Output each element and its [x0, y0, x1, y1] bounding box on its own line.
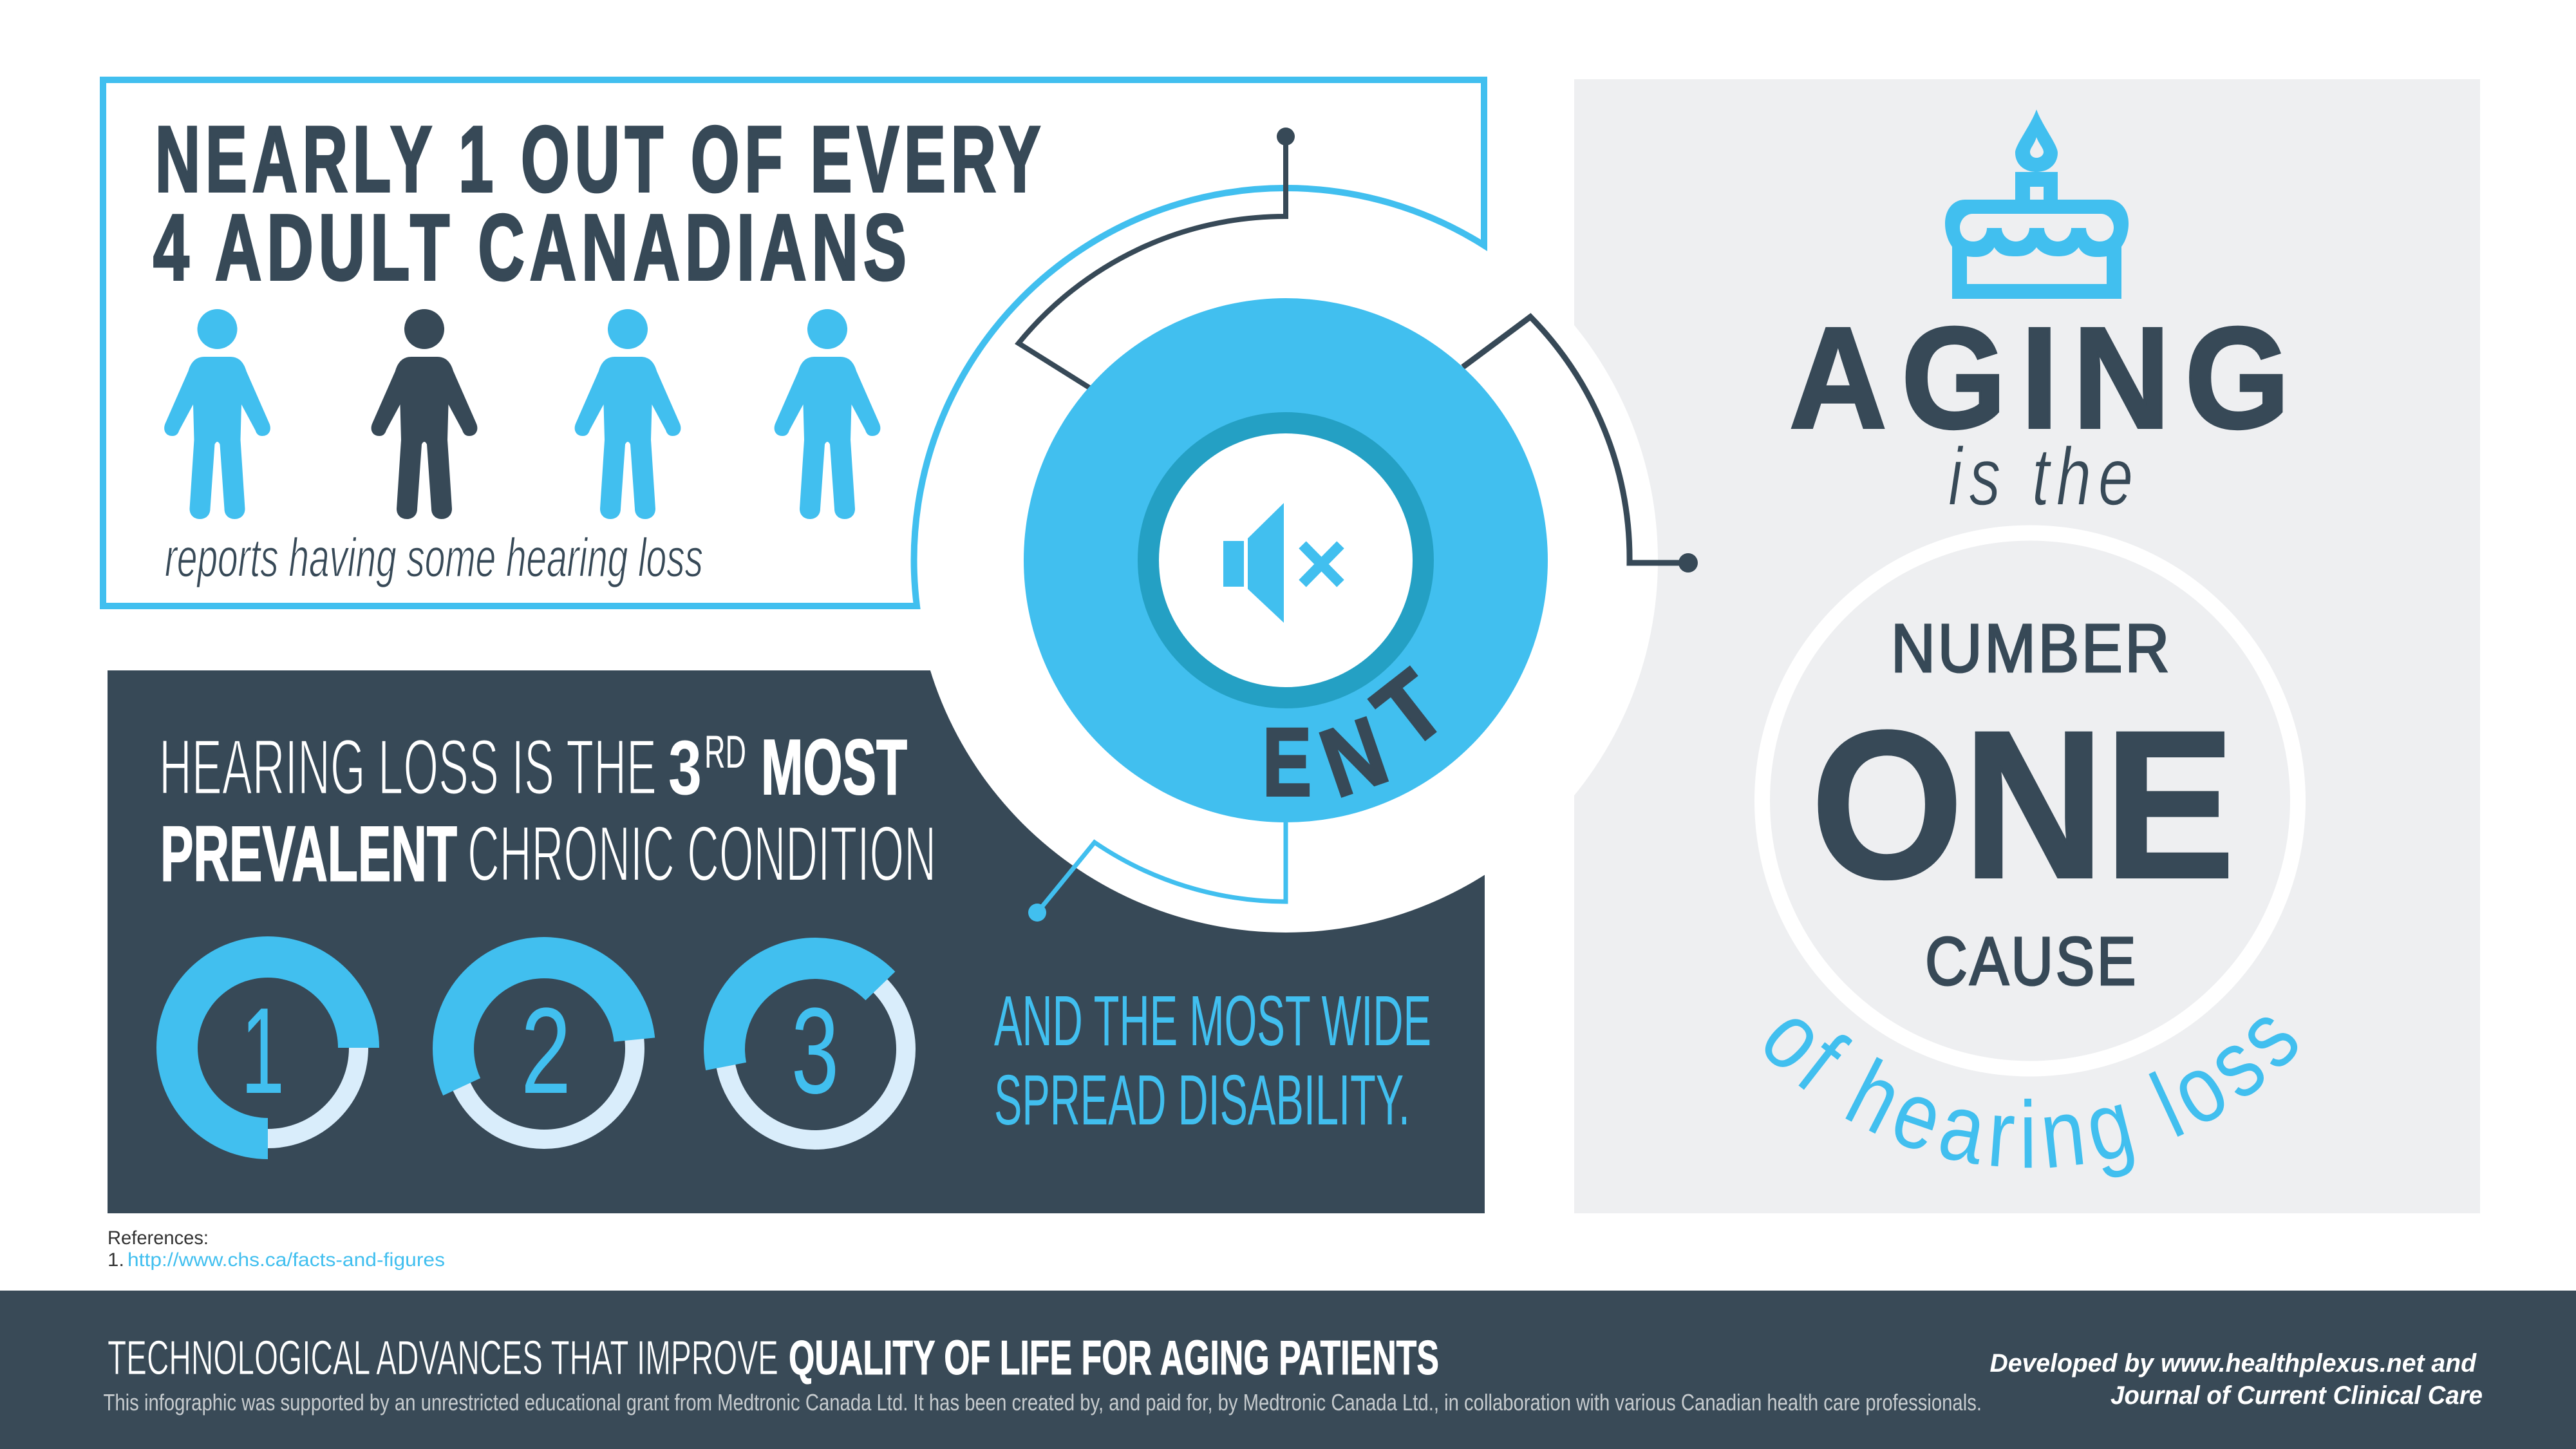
developer credit: Journal of Current Clinical Care	[2111, 1381, 2483, 1410]
heading: hearing loss is the 3rd most prevalent chronic condition: MOST	[761, 723, 907, 811]
heading: aging: AGING	[1789, 298, 2304, 459]
label: ENT	[1263, 650, 1464, 817]
chart: ring 2	[433, 937, 655, 1139]
panel: aging background	[1574, 79, 2480, 1213]
heading: hearing loss is the 3rd most prevalent chronic condition: PREVALENT	[160, 810, 457, 898]
icon: birthday cake	[1945, 109, 2129, 299]
connector: right dark arc	[1463, 317, 1698, 573]
chart: ring 1: 1	[241, 983, 285, 1119]
title: nearly 1 out of every 4 adult Canadians	[153, 107, 1046, 299]
icon: person 2 highlighted	[371, 309, 477, 519]
panel: one in four outline	[103, 80, 1484, 606]
panel: chronic condition background	[108, 670, 1485, 1213]
sponsorship disclaimer: This infographic was supported by an unrestricted educational grant from Medtronic Canada Ltd. It has been created by, and paid for, by Medtronic Canada Ltd., in collaboration with various Canadian health care professionals.	[103, 1389, 1982, 1416]
references: References:	[108, 1227, 209, 1249]
footer headline bold: QUALITY OF LIFE FOR AGING PATIENTS	[789, 1331, 1439, 1385]
label: ENT: N	[1308, 696, 1400, 817]
footer bar	[0, 1291, 2576, 1449]
title: nearly 1 out of every 4 adult Canadians: NEARLY 1 OUT OF EVERY	[155, 107, 1046, 211]
developer credit: Developed by www.healthplexus.net and	[1989, 1349, 2477, 1378]
inner ring	[1149, 422, 1423, 698]
heading: hearing loss is the 3rd most prevalent chronic condition	[159, 723, 936, 898]
icon: four people	[164, 309, 880, 519]
caption: reports having some hearing loss: reports having some hearing loss	[165, 527, 703, 588]
label: ENT: E	[1263, 708, 1312, 816]
text: and the most wide spread disability: AND THE MOST WIDE	[994, 981, 1431, 1061]
chart: ring 1	[156, 936, 379, 1159]
developer credit	[1989, 1349, 2483, 1410]
references	[108, 1227, 445, 1271]
label: ENT: T	[1355, 650, 1464, 768]
white central disc	[914, 188, 1658, 933]
heading: hearing loss is the 3rd most prevalent chronic condition: CHRONIC CONDITION	[467, 810, 936, 898]
badge: number one cause	[1762, 533, 2298, 1069]
title: nearly 1 out of every 4 adult Canadians: 4 ADULT CANADIANS	[153, 195, 912, 299]
icon: muted speaker	[1223, 503, 1340, 623]
heading: hearing loss is the 3rd most prevalent chronic condition: HEARING LOSS IS THE	[159, 723, 657, 811]
chart: ring 2: 2	[521, 983, 571, 1119]
heading: hearing loss is the 3rd most prevalent chronic condition: RD	[704, 727, 746, 778]
footer headline: TECHNOLOGICAL ADVANCES THAT IMPROVE	[108, 1331, 778, 1385]
heading: hearing loss is the 3rd most prevalent chronic condition: 3	[668, 724, 702, 811]
badge: number one cause: ONE	[1811, 688, 2235, 922]
curved text: of hearing loss	[1765, 1018, 2297, 1177]
icon: person 3	[575, 309, 681, 519]
text: and the most wide spread disability: SPREAD DISABILITY.	[994, 1061, 1410, 1140]
chart: ring 3: 3	[791, 983, 839, 1119]
curved text: of hearing loss: of hearing loss	[1765, 1018, 2297, 1177]
references: http://www.chs.ca/facts-and-figures	[127, 1249, 445, 1271]
connector: lower blue arc	[1028, 822, 1286, 922]
chart: ring 3	[704, 938, 906, 1140]
central blue disc	[1024, 298, 1548, 822]
badge: number one cause: NUMBER	[1891, 611, 2172, 687]
text: and the most wide spread disability	[994, 981, 1431, 1140]
icon: person 4	[775, 309, 880, 519]
references: 1.	[108, 1249, 124, 1271]
icon: person 1	[164, 309, 270, 519]
connector: upper dark arc	[1019, 128, 1295, 388]
text: is the: is the	[1948, 431, 2140, 522]
badge: number one cause: CAUSE	[1925, 923, 2138, 999]
